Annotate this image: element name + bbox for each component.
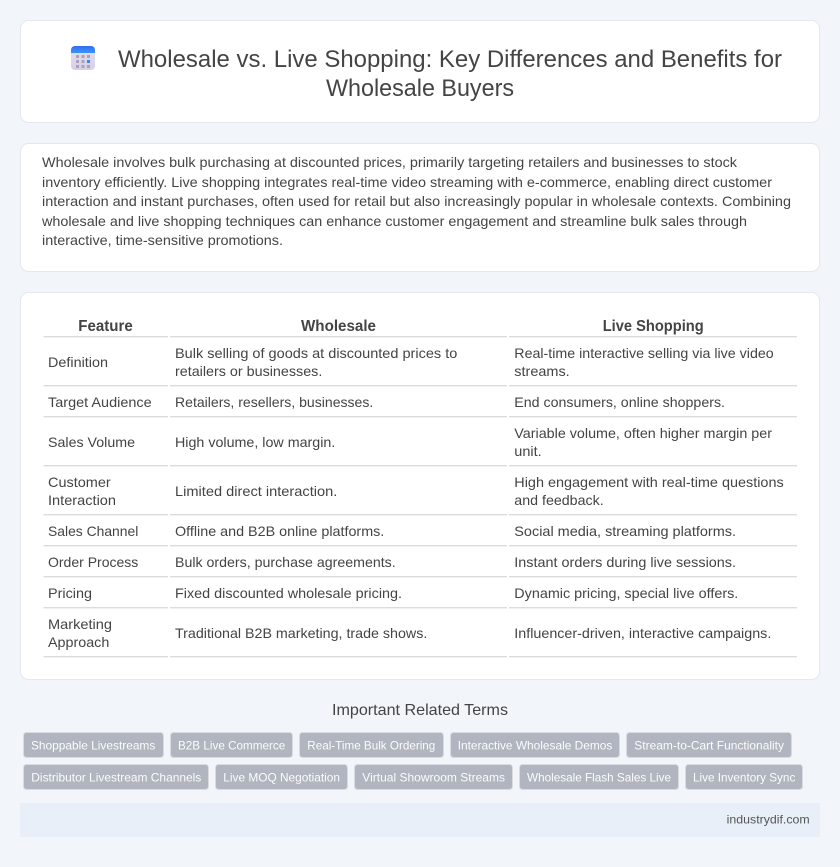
row: marketing approach: Marketing xyxy=(48,616,112,632)
row: pricing: Pricing xyxy=(48,585,92,601)
row: pricing: Fixed discounted wholesale pricing. xyxy=(175,585,402,601)
row: target audience: Target Audience xyxy=(48,394,152,410)
text block: introduction paragraph: inventory efficiently. Live shopping integrates real-time video streaming with e-commerce, enabling direct customer xyxy=(42,174,772,190)
table header row: Wholesale xyxy=(301,318,376,335)
row: order process xyxy=(48,554,736,570)
row: definition: retailers or businesses. xyxy=(175,363,322,379)
row: definition: streams. xyxy=(514,363,570,379)
row: sales channel: Offline and B2B online platforms. xyxy=(175,523,384,539)
row: sales volume: Sales Volume xyxy=(48,434,135,450)
table header row xyxy=(78,318,704,335)
row: sales volume: High volume, low margin. xyxy=(175,434,335,450)
related term tags: Virtual Showroom Streams xyxy=(362,770,505,784)
panel: header xyxy=(20,20,820,122)
row: pricing: Dynamic pricing, special live offers. xyxy=(514,585,738,601)
footer band: industrydif.com xyxy=(727,812,810,826)
heading: important related terms: Important Related Terms xyxy=(332,702,508,719)
row: sales volume xyxy=(48,425,772,459)
related term tags: B2B Live Commerce xyxy=(178,738,286,752)
row: definition: Bulk selling of goods at discounted prices to xyxy=(175,345,458,361)
row: order process: Instant orders during live sessions. xyxy=(514,554,736,570)
row: definition: Definition xyxy=(48,354,108,370)
panel: introduction xyxy=(20,144,820,272)
row: customer interaction: and feedback. xyxy=(514,492,604,508)
row: target audience xyxy=(48,394,725,410)
title: Wholesale Buyers xyxy=(326,75,514,102)
row: customer interaction: Limited direct interaction. xyxy=(175,483,337,499)
related term tags: Distributor Livestream Channels xyxy=(31,770,201,784)
title: Wholesale vs. Live Shopping: Key Differences and Benefits for xyxy=(118,46,782,73)
row: customer interaction: High engagement with real-time questions xyxy=(514,474,784,490)
row: definition xyxy=(48,345,774,379)
row: marketing approach: Influencer-driven, interactive campaigns. xyxy=(514,625,771,641)
title xyxy=(118,46,782,102)
row: definition: Real-time interactive selling via live video xyxy=(514,345,774,361)
text block: introduction paragraph: interactive, time-sensitive promotions. xyxy=(42,232,283,248)
row: marketing approach: Traditional B2B marketing, trade shows. xyxy=(175,625,427,641)
related term tags: Real-Time Bulk Ordering xyxy=(307,738,435,752)
related term tags xyxy=(24,732,802,790)
row: target audience: Retailers, resellers, businesses. xyxy=(175,394,373,410)
related term tags: Shoppable Livestreams xyxy=(31,738,155,752)
row: pricing xyxy=(48,585,738,601)
text block: introduction paragraph: Wholesale involves bulk purchasing at discounted prices, primarily targeting retailers and businesses to stock xyxy=(42,154,738,170)
row: marketing approach: Approach xyxy=(48,634,109,650)
panel: comparison table xyxy=(20,292,820,680)
related term tags: Live MOQ Negotiation xyxy=(223,770,340,784)
row: order process: Bulk orders, purchase agreements. xyxy=(175,554,396,570)
row: sales channel: Social media, streaming platforms. xyxy=(514,523,736,539)
row: customer interaction: Interaction xyxy=(48,492,116,508)
row: marketing approach xyxy=(48,616,771,650)
row: order process: Order Process xyxy=(48,554,138,570)
table header row: Feature xyxy=(78,318,133,335)
table header row: Live Shopping xyxy=(603,318,704,335)
related term tags: Stream-to-Cart Functionality xyxy=(634,738,784,752)
text block: introduction paragraph: wholesale and live shopping techniques can enhance customer engagement and streamline bulk sales through xyxy=(41,213,747,229)
row: customer interaction: Customer xyxy=(48,474,111,490)
related term tags: Live Inventory Sync xyxy=(693,770,795,784)
row: customer interaction xyxy=(48,474,784,508)
text block: introduction paragraph: interaction and instant purchases, often used for retail but also increasingly popular in wholesale contexts. Combining xyxy=(42,193,791,209)
icon: calendar xyxy=(71,46,95,70)
text block: introduction paragraph xyxy=(41,154,791,248)
related term tags: Wholesale Flash Sales Live xyxy=(527,770,671,784)
row: sales volume: unit. xyxy=(514,443,542,459)
related term tags: Interactive Wholesale Demos xyxy=(458,738,612,752)
footer band xyxy=(20,803,820,837)
row: sales channel: Sales Channel xyxy=(48,523,138,539)
row: sales channel xyxy=(48,523,736,539)
row: sales volume: Variable volume, often higher margin per xyxy=(514,425,772,441)
row: target audience: End consumers, online shoppers. xyxy=(514,394,725,410)
